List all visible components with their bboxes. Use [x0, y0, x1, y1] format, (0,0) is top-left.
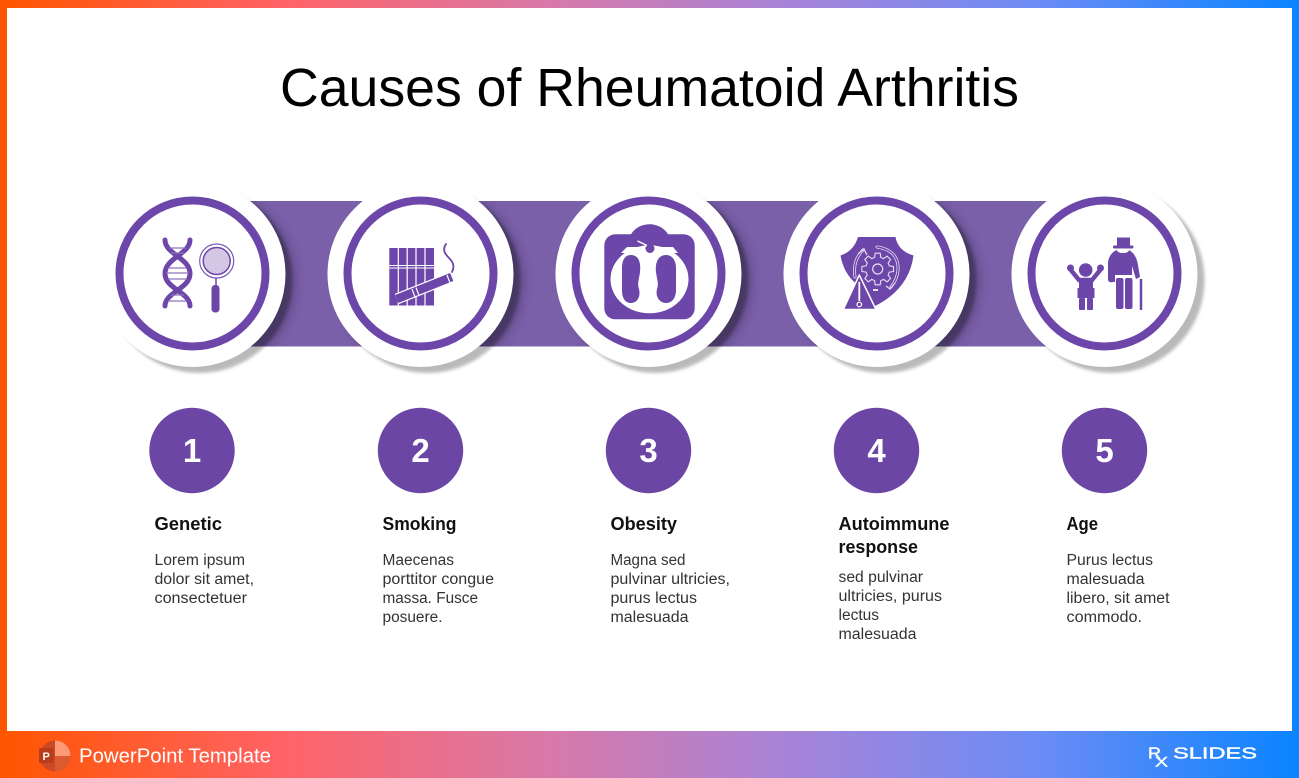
icon: PowerPoint logo: P: [43, 751, 50, 763]
body text: malesuada: [610, 609, 689, 626]
panel: cause 1 text: [149, 408, 254, 607]
heading: Smoking: Smoking: [382, 514, 456, 534]
body text: ultricies, purus: [838, 588, 942, 605]
body text: pulvinar ultricies,: [610, 571, 730, 588]
body text: [382, 552, 494, 626]
panel: cause 3 icon circle: [556, 181, 748, 373]
connecting band: [250, 201, 1047, 346]
body text: Lorem ipsum: [154, 552, 245, 569]
body text: Purus lectus: [1066, 552, 1153, 569]
body text: consectetuer: [154, 590, 247, 607]
number badge 5: [1062, 408, 1147, 493]
panel: cause 5 icon circle: [1012, 181, 1204, 373]
logo: RX Slides: SLIDES: [1173, 746, 1257, 762]
number badge 2: 2: [411, 432, 430, 469]
number badge 3: 3: [639, 432, 658, 469]
body text: [1066, 552, 1170, 626]
icon: cigarette and pack: [389, 244, 453, 306]
icon: PowerPoint logo: [39, 740, 70, 772]
icon: shield with gear and warning triangle: [840, 237, 914, 310]
footer label: PowerPoint Template: [79, 744, 271, 768]
logo: RX Slides: [1148, 746, 1257, 770]
number badge 4: [834, 408, 919, 493]
heading: Genetic: Genetic: [154, 514, 222, 534]
number badge 5: 5: [1095, 432, 1114, 469]
heading: Autoimmune response: [838, 514, 950, 557]
body text: malesuada: [1066, 571, 1145, 588]
body text: purus lectus: [610, 590, 697, 607]
body text: sed pulvinar: [838, 569, 923, 586]
body text: lectus: [838, 607, 879, 624]
body text: [154, 552, 254, 607]
number badge 2: [378, 408, 463, 493]
body text: malesuada: [838, 626, 917, 643]
logo: RX Slides: R: [1148, 746, 1161, 762]
number badge 4: 4: [867, 432, 886, 469]
panel: cause 5 text: [1062, 408, 1170, 626]
body text: [610, 552, 730, 626]
body text: dolor sit amet,: [154, 571, 254, 588]
panel: cause 2 icon circle: [328, 181, 520, 373]
title: Causes of Rheumatoid Arthritis: [280, 58, 1019, 118]
body text: libero, sit amet: [1066, 590, 1170, 607]
heading: Autoimmune response: response: [838, 537, 918, 557]
icon: child and elderly man: [1067, 238, 1141, 310]
heading: Obesity: Obesity: [610, 514, 677, 534]
panel: cause 1 icon circle: [100, 181, 292, 373]
number badge 1: 1: [183, 432, 201, 469]
icon: DNA and magnifying glass: [165, 240, 234, 312]
panel: cause 2 text: [378, 408, 494, 626]
body text: porttitor congue: [382, 571, 494, 588]
body text: massa. Fusce: [382, 590, 478, 607]
number badge 1: [149, 408, 235, 493]
body text: [838, 569, 942, 643]
heading: Autoimmune response: Autoimmune: [838, 514, 950, 534]
number badge 3: [606, 408, 691, 493]
logo: RX Slides: X: [1155, 754, 1169, 770]
body text: posuere.: [382, 609, 442, 626]
panel: cause 4 text: [834, 408, 950, 643]
body text: commodo.: [1066, 609, 1142, 626]
body text: Magna sed: [610, 552, 686, 569]
heading: Age: Age: [1066, 514, 1098, 534]
body text: Maecenas: [382, 552, 454, 569]
panel: cause 3 text: [606, 408, 730, 626]
panel: cause 4 icon circle: [784, 181, 976, 373]
icon: weighing scale: [604, 224, 695, 319]
